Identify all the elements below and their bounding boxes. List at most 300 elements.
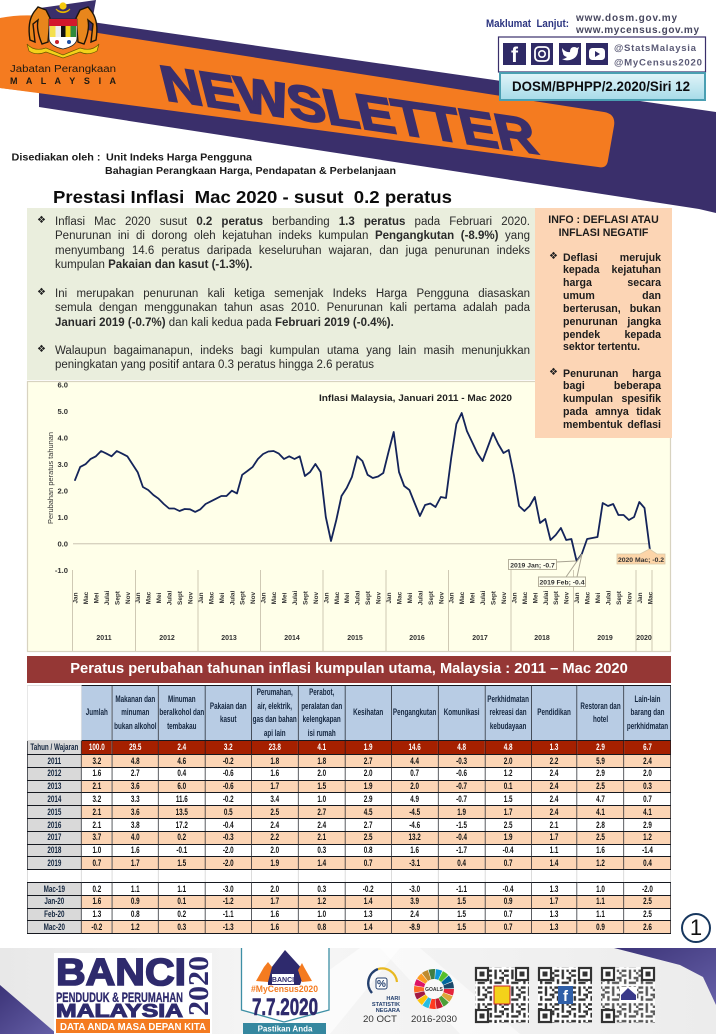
panel: info on deflation: penurunan jangka [563, 316, 661, 328]
panel: info on deflation: membentuk deflasi [563, 419, 661, 431]
data table: annual inflation by main group: 2.2 [270, 832, 279, 842]
data table: annual inflation by main group: 2.5 [504, 820, 512, 830]
data table: annual inflation by main group: 1.3 [550, 909, 558, 919]
data table: annual inflation by main group: -0.4 [503, 845, 514, 855]
callout: 2019 Feb: 2019 Feb; -0.4 [540, 580, 585, 586]
data table: annual inflation by main group: 1.1 [177, 884, 186, 894]
month labels: Sept [114, 590, 121, 605]
month labels: Mei [219, 592, 226, 603]
census date badge: #MyCensus2020 [251, 984, 318, 995]
data table: annual inflation by main group: 3.4 [270, 794, 279, 804]
data table: annual inflation by main group: 2.4 [317, 820, 326, 830]
icon: facebook [503, 43, 526, 67]
table column headers: Jumlah [86, 707, 108, 717]
data table: annual inflation by main group: 2014 [47, 794, 61, 804]
data table: annual inflation by main group: 17.2 [176, 820, 188, 830]
table heading band: Peratus perubahan tahunan inflasi kumpulan utama, Malaysia : 2011 – Mac 2020 [70, 661, 628, 677]
icon: twitter [559, 43, 581, 65]
bullet one [37, 215, 530, 271]
data table: annual inflation by main group: 1.6 [92, 768, 101, 778]
month labels: Mac [208, 591, 215, 604]
statistics day logo: 20 OCT [363, 1014, 398, 1024]
census logo: MALAYSIA [56, 1001, 183, 1021]
prepared by: Bahagian Perangkaan Harga, Pendapatan & Perbelanjaan [105, 165, 396, 177]
data table: annual inflation by main group: -1.2 [223, 896, 234, 906]
month labels: Julai [606, 591, 612, 605]
info heading: INFLASI NEGATIF [559, 226, 648, 238]
month labels: Sept [302, 590, 309, 605]
month labels: Nov [626, 592, 633, 604]
statistics day logo [363, 968, 400, 1024]
panel: info on deflation: Penurunan harga [563, 368, 661, 380]
data table: annual inflation by main group: 1.7 [270, 781, 279, 791]
data table: annual inflation by main group: 2.4 [550, 807, 558, 817]
data table: annual inflation by main group: 5.9 [596, 756, 605, 766]
header banner [0, 0, 716, 213]
data table: annual inflation by main group: -1.3 [223, 922, 234, 932]
year labels: 2012 [159, 635, 175, 642]
y axis labels: 5.0 [57, 407, 68, 416]
data table: annual inflation by main group: 0.2 [177, 832, 186, 842]
panel: summary commentary: ❖ [37, 215, 46, 226]
icon: instagram [531, 43, 553, 65]
month labels: Jan [574, 592, 581, 604]
month labels: Nov [501, 592, 508, 604]
table column headers: perkhidmatan [627, 721, 668, 731]
panel: info on deflation: ❖ [549, 367, 558, 378]
agency name: M A L A Y S I A [10, 76, 116, 86]
data table: annual inflation by main group: 2.5 [643, 896, 652, 906]
data table: annual inflation by main group: -0.7 [456, 781, 467, 791]
data table: annual inflation by main group: 1.7 [504, 807, 512, 817]
table weights row: 14.6 [409, 742, 421, 752]
panel: summary commentary: Ini merupakan penurunan kali ketiga semenjak Indeks Harga Pengguna diasaskan [55, 288, 530, 300]
icon: youtube [586, 43, 608, 65]
data table: annual inflation by main group: -0.2 [363, 884, 374, 894]
table weights row: 23.8 [269, 742, 281, 752]
data table: annual inflation by main group: 3.9 [410, 896, 419, 906]
month labels: Mei [156, 592, 163, 603]
data table: annual inflation by main group: 0.2 [92, 884, 101, 894]
more information links: www.dosm.gov.my [575, 13, 677, 24]
data table: annual inflation by main group: -0.2 [91, 922, 102, 932]
data table: annual inflation by main group: 1.6 [410, 845, 419, 855]
data table: annual inflation by main group: 2.1 [550, 820, 558, 830]
data table: annual inflation by main group: 2.1 [92, 781, 101, 791]
bullet two [37, 287, 530, 329]
data table: annual inflation by main group: 2.4 [270, 820, 279, 830]
data table: annual inflation by main group: -0.2 [223, 756, 234, 766]
census logo: 2020 [184, 956, 215, 1016]
data table: annual inflation by main group: 1.6 [596, 845, 605, 855]
data table: annual inflation by main group: 2011 [47, 756, 61, 766]
month labels: Julai [292, 591, 299, 605]
year labels: 2015 [347, 635, 363, 642]
panel: summary commentary: Walaupun bagaimanapun, indeks bagi kumpulan utama yang lain masih menunjukkan [55, 345, 530, 357]
data table: annual inflation by main group: 4.7 [596, 794, 605, 804]
data table: annual inflation by main group: 0.7 [504, 922, 512, 932]
data table: annual inflation by main group: 2.0 [504, 756, 512, 766]
data table: annual inflation by main group: 4.1 [596, 807, 605, 817]
data table: annual inflation by main group: 2.4 [550, 781, 558, 791]
data table: annual inflation by main group: 1.6 [270, 909, 279, 919]
month labels: Nov [250, 592, 257, 604]
data table: annual inflation by main group: 2.5 [643, 909, 652, 919]
data table: annual inflation by main group: 0.3 [317, 845, 326, 855]
table weights row: 6.7 [643, 742, 652, 752]
data table: annual inflation by main group: 1.1 [596, 896, 605, 906]
data table: annual inflation by main group: 3.8 [131, 820, 140, 830]
month labels: Nov [564, 592, 571, 604]
panel: info on deflation [535, 208, 672, 438]
month labels: Jan [198, 592, 205, 604]
data table: annual inflation by main group: 2018 [47, 845, 61, 855]
data table: annual inflation by main group: 0.3 [643, 781, 652, 791]
data table: annual inflation by main group: 1.6 [131, 845, 140, 855]
table column headers: hotel [593, 714, 608, 724]
data table: annual inflation by main group: -0.4 [503, 884, 514, 894]
data table: annual inflation by main group: 2.7 [364, 756, 373, 766]
data table: annual inflation by main group: 1.5 [457, 909, 466, 919]
bullet three [37, 344, 530, 371]
data table: annual inflation by main group: 6.0 [177, 781, 186, 791]
data table: annual inflation by main group: 2.7 [364, 820, 373, 830]
data table: annual inflation by main group: 3.2 [92, 756, 101, 766]
data table: annual inflation by main group: 3.6 [131, 781, 140, 791]
year labels [96, 635, 652, 642]
y axis labels: 3.0 [57, 460, 68, 469]
census date badge: BANCI [272, 977, 294, 984]
month labels: Julai [167, 591, 174, 605]
month labels: Nov [125, 592, 132, 604]
title: Prestasi Inflasi Mac 2020 - susut 0.2 peratus [53, 187, 452, 207]
data table: annual inflation by main group: 0.5 [224, 807, 233, 817]
census logo: BANCI [56, 952, 186, 994]
data table: annual inflation by main group: 0.7 [92, 858, 101, 868]
year labels: 2014 [284, 635, 300, 642]
month labels: Mac [271, 591, 278, 604]
data table: annual inflation by main group: 3.6 [131, 807, 140, 817]
panel: summary commentary [27, 208, 535, 380]
panel: summary commentary: semula dengan menggunakan tahun asas 2010. Penurunan kali pertama adalah pada [55, 302, 530, 314]
table column headers: Restoran dan [580, 700, 621, 710]
month labels: Sept [616, 590, 623, 605]
data table: annual inflation by main group: 3.7 [92, 832, 101, 842]
month labels: Nov [376, 592, 383, 604]
data table: annual inflation by main group: 0.8 [364, 845, 373, 855]
y axis labels [55, 380, 68, 575]
month labels: Mac [459, 591, 466, 604]
table weights row: 100.0 [89, 742, 105, 752]
prepared by [12, 152, 396, 177]
data table: annual inflation by main group: 1.3 [550, 884, 558, 894]
data table: annual inflation by main group: 4.4 [410, 756, 419, 766]
table column headers: Perkhidmatan [487, 694, 529, 704]
table column headers: Makanan dan [115, 694, 155, 704]
month labels: Jan [261, 592, 268, 604]
month labels: Mei [595, 592, 602, 603]
prepared by: Disediakan oleh : [12, 152, 100, 164]
data table: annual inflation by main group: 1.8 [317, 756, 326, 766]
panel: info on deflation: pada amnya tidak [563, 406, 661, 418]
data table: annual inflation by main group: 1.2 [131, 922, 140, 932]
census logo: PENDUDUK & PERUMAHAN [56, 989, 183, 1005]
icon: Malaysia coat of arms [27, 2, 99, 58]
data table: annual inflation by main group: 2.4 [410, 909, 419, 919]
panel: info on deflation: harga secara [563, 277, 661, 289]
panel: info on deflation: umum dan [563, 290, 661, 302]
data table: annual inflation by main group: -2.0 [642, 884, 653, 894]
inflation line [75, 413, 650, 561]
data table: annual inflation by main group: 1.4 [550, 858, 558, 868]
data table: annual inflation by main group: Jan-20 [44, 896, 64, 906]
table column headers: Pakaian dan [210, 700, 247, 710]
data table: annual inflation by main group: 1.5 [504, 794, 512, 804]
month labels: Mac [146, 591, 153, 604]
data table: annual inflation by main group: 1.9 [364, 781, 373, 791]
data table: annual inflation by main group: 1.1 [131, 884, 140, 894]
month labels: Sept [365, 590, 372, 605]
data table: annual inflation by main group: 2.5 [270, 807, 279, 817]
data table: annual inflation by main group: 2012 [47, 768, 61, 778]
data table: annual inflation by main group: 1.7 [270, 896, 279, 906]
agency name: Jabatan Perangkaan [10, 64, 116, 75]
callout: 2020 Mac [617, 549, 665, 564]
data table: annual inflation by main group: 2.6 [643, 922, 652, 932]
panel: summary commentary: kumpulan Pakaian dan kasut (-1.3%). [55, 259, 253, 271]
table column headers: Perumahan, [257, 687, 293, 697]
year labels: 2019 [597, 635, 613, 642]
y axis labels: 0.0 [57, 540, 68, 548]
data table: annual inflation by main group: -2.0 [223, 845, 234, 855]
panel: summary commentary: Penurunan ini di dorong oleh kejatuhan indeks kumpulan Pengangkutan (-8.9%) yang [55, 230, 530, 242]
data table: annual inflation by main group: 4.8 [131, 756, 140, 766]
table column headers: Lain-lain [635, 694, 660, 704]
callout: 2019 Jan [508, 560, 576, 570]
month labels: Jan [72, 592, 80, 604]
month labels [72, 590, 654, 605]
data table: annual inflation by main group: 2.0 [270, 884, 279, 894]
table column headers: tembakau [167, 721, 196, 731]
data table: annual inflation by main group: -1.4 [642, 845, 653, 855]
panel: info on deflation: pendek kepada [563, 329, 661, 341]
statistics day logo: HARI [386, 996, 400, 1002]
table weights row: 29.5 [129, 742, 141, 752]
more information links [486, 13, 699, 36]
table column headers: kasut [220, 714, 236, 724]
data table: annual inflation by main group: -0.6 [456, 768, 467, 778]
data table: annual inflation by main group: 2.7 [131, 768, 140, 778]
data table: annual inflation by main group: 2.8 [596, 820, 605, 830]
data table: annual inflation by main group: -1.1 [456, 884, 467, 894]
table column headers: minuman [121, 707, 149, 717]
table column headers: beralkohol dan [159, 707, 204, 717]
series reference box [500, 73, 705, 100]
data table: annual inflation by main group [27, 685, 671, 934]
month labels: Nov [438, 592, 445, 604]
data table: annual inflation by main group: 0.7 [504, 858, 512, 868]
data table: annual inflation by main group: 2.0 [364, 768, 373, 778]
month labels: Mac [396, 591, 404, 604]
month labels: Nov [313, 592, 320, 604]
data table: annual inflation by main group: 0.4 [643, 858, 652, 868]
data table: annual inflation by main group: 2.2 [550, 756, 558, 766]
data table: annual inflation by main group: 0.7 [410, 768, 419, 778]
QR code: census [601, 967, 655, 1023]
data table: annual inflation by main group: -1.5 [456, 820, 467, 830]
data table: annual inflation by main group: 0.3 [317, 884, 326, 894]
data table: annual inflation by main group: 2.1 [317, 832, 326, 842]
data table: annual inflation by main group: 1.7 [550, 832, 558, 842]
social media box [498, 37, 706, 72]
data table: annual inflation by main group: 2.0 [643, 768, 652, 778]
data table: annual inflation by main group: 1.4 [364, 922, 373, 932]
table column headers: air, elektrik, [257, 700, 292, 710]
data table: annual inflation by main group: 2.7 [317, 807, 326, 817]
panel: summary commentary: peningkatan yang positif antara 0.3 peratus hingga 2.6 peratus [55, 359, 374, 371]
data table: annual inflation by main group: -0.3 [456, 756, 467, 766]
data table: annual inflation by main group: Mac-19 [44, 884, 65, 894]
QR code: facebook: f [563, 988, 569, 1005]
y axis labels: 2.0 [57, 486, 68, 496]
info bullet one [549, 251, 662, 353]
info heading: INFO : DEFLASI ATAU [548, 214, 659, 226]
data table: annual inflation by main group: -0.1 [176, 845, 187, 855]
data table: annual inflation by main group: 1.3 [92, 909, 101, 919]
data table: annual inflation by main group: 1.5 [457, 922, 466, 932]
line chart: inflation [26, 380, 672, 652]
QR code: facebook [538, 967, 592, 1023]
month labels: Mei [407, 592, 414, 603]
data table: annual inflation by main group: 4.5 [364, 807, 373, 817]
more information links: www.mycensus.gov.my [575, 25, 699, 36]
table heading band [27, 656, 671, 683]
table weights row: 1.9 [364, 742, 373, 752]
more information links: Maklumat Lanjut: [486, 18, 569, 30]
data table: annual inflation by main group: 1.5 [457, 896, 466, 906]
data table: annual inflation by main group: 1.9 [270, 858, 279, 868]
data table: annual inflation by main group: 1.2 [504, 768, 512, 778]
table column headers: gas dan bahan [253, 714, 297, 724]
month labels: Sept [240, 590, 247, 605]
page number [681, 913, 711, 943]
dark navy ribbon [39, 0, 716, 213]
page number: 1 [690, 915, 702, 940]
table column headers: Kesihatan [353, 707, 383, 717]
panel: info on deflation: kumpulan spesifik [563, 393, 661, 405]
data table: annual inflation by main group: 1.6 [270, 922, 279, 932]
data table: annual inflation by main group: 1.1 [596, 909, 605, 919]
callout: 2020 Mac: 2020 Mac; -0.2 [618, 557, 664, 564]
month labels: Jan [386, 592, 393, 604]
data table: annual inflation by main group: 13.2 [409, 832, 421, 842]
month labels: Mac [83, 591, 90, 604]
social media box: @StatsMalaysia [614, 43, 697, 54]
month labels: Sept [490, 590, 498, 605]
table column headers: bukan alkohol [114, 721, 156, 731]
month labels: Mei [344, 592, 351, 603]
data table: annual inflation by main group: 1.0 [92, 845, 101, 855]
month labels: Jan [637, 592, 644, 604]
data table: annual inflation by main group: 1.9 [457, 807, 466, 817]
data table: annual inflation by main group: 2.4 [643, 756, 652, 766]
data table: annual inflation by main group: -0.7 [456, 794, 467, 804]
statistics day logo: % [377, 979, 386, 990]
data table: annual inflation by main group: 1.4 [317, 858, 326, 868]
prepared by: Unit Indeks Harga Pengguna [106, 152, 252, 164]
data table: annual inflation by main group: 0.7 [643, 794, 652, 804]
data table: annual inflation by main group: -4.6 [409, 820, 420, 830]
data table: annual inflation by main group: 0.9 [504, 896, 512, 906]
data table: annual inflation by main group: 3.3 [131, 794, 140, 804]
data table: annual inflation by main group: 4.9 [410, 794, 419, 804]
census logo: DATA ANDA MASA DEPAN KITA [60, 1022, 206, 1033]
table weights row: Tahun / Wajaran [30, 742, 78, 752]
data table: annual inflation by main group: 1.3 [364, 909, 373, 919]
data table: annual inflation by main group: 3.2 [92, 794, 101, 804]
data table: annual inflation by main group: 2017 [47, 832, 61, 842]
data table: annual inflation by main group: 2.1 [92, 807, 101, 817]
orange ribbon [0, 15, 614, 167]
data table: annual inflation by main group: 0.4 [457, 858, 466, 868]
month labels: Mac [585, 591, 592, 604]
month labels: Nov [188, 592, 194, 604]
table weights row [28, 741, 670, 754]
data table: annual inflation by main group: -2.0 [223, 858, 234, 868]
data table: annual inflation by main group: 1.1 [550, 845, 558, 855]
data table: annual inflation by main group: 2.9 [596, 768, 605, 778]
series reference box: DOSM/BPHPP/2.2020/Siri 12 [512, 78, 690, 94]
data table: annual inflation by main group: 1.8 [270, 756, 279, 766]
month labels: Julai [229, 591, 236, 605]
table column headers: rekreasi dan [490, 707, 527, 717]
data table: annual inflation by main group: 0.2 [177, 909, 186, 919]
data table: annual inflation by main group: 2.1 [92, 820, 101, 830]
data table: annual inflation by main group: 1.6 [270, 768, 279, 778]
month labels: Julai [480, 591, 487, 605]
census date badge: 7.7.2020 [252, 994, 318, 1021]
data table: annual inflation by main group: 0.8 [317, 922, 326, 932]
month labels: Sept [428, 590, 435, 605]
data table: annual inflation by main group: 0.1 [504, 781, 512, 791]
data table: annual inflation by main group: Mac-20 [44, 922, 65, 932]
panel: summary commentary: Inflasi Mac 2020 susut 0.2 peratus berbanding 1.3 peratus pada Februari 2020. [55, 216, 530, 228]
data table: annual inflation by main group: 1.6 [92, 896, 101, 906]
data table: annual inflation by main group: 0.1 [177, 896, 186, 906]
data table: annual inflation by main group: 0.8 [131, 909, 140, 919]
table column headers: isi rumah [308, 728, 336, 738]
month labels: Jan [449, 592, 456, 604]
data table: annual inflation by main group: 0.9 [596, 922, 605, 932]
data table: annual inflation by main group: 2.0 [270, 845, 279, 855]
data table: annual inflation by main group: -0.4 [223, 820, 234, 830]
data table: annual inflation by main group: -3.0 [223, 884, 234, 894]
y axis labels: -1.0 [55, 566, 68, 575]
data table: annual inflation by main group: 1.0 [317, 909, 326, 919]
table column headers: Minuman [168, 694, 196, 704]
data table: annual inflation by main group: 1.2 [317, 896, 326, 906]
data table: annual inflation by main group: 2.4 [550, 768, 558, 778]
panel: info on deflation: kepada kejatuhan [563, 264, 661, 276]
table column headers: peralatan dan [301, 700, 342, 710]
panel: summary commentary: ❖ [37, 344, 46, 355]
data table: annual inflation by main group: -1.7 [456, 845, 467, 855]
month labels: Sept [177, 590, 184, 605]
data table: annual inflation by main group: 2015 [47, 807, 61, 817]
data table: annual inflation by main group: -3.0 [409, 884, 420, 894]
data table: annual inflation by main group: -0.6 [223, 781, 234, 791]
data table: annual inflation by main group: 0.9 [131, 896, 140, 906]
